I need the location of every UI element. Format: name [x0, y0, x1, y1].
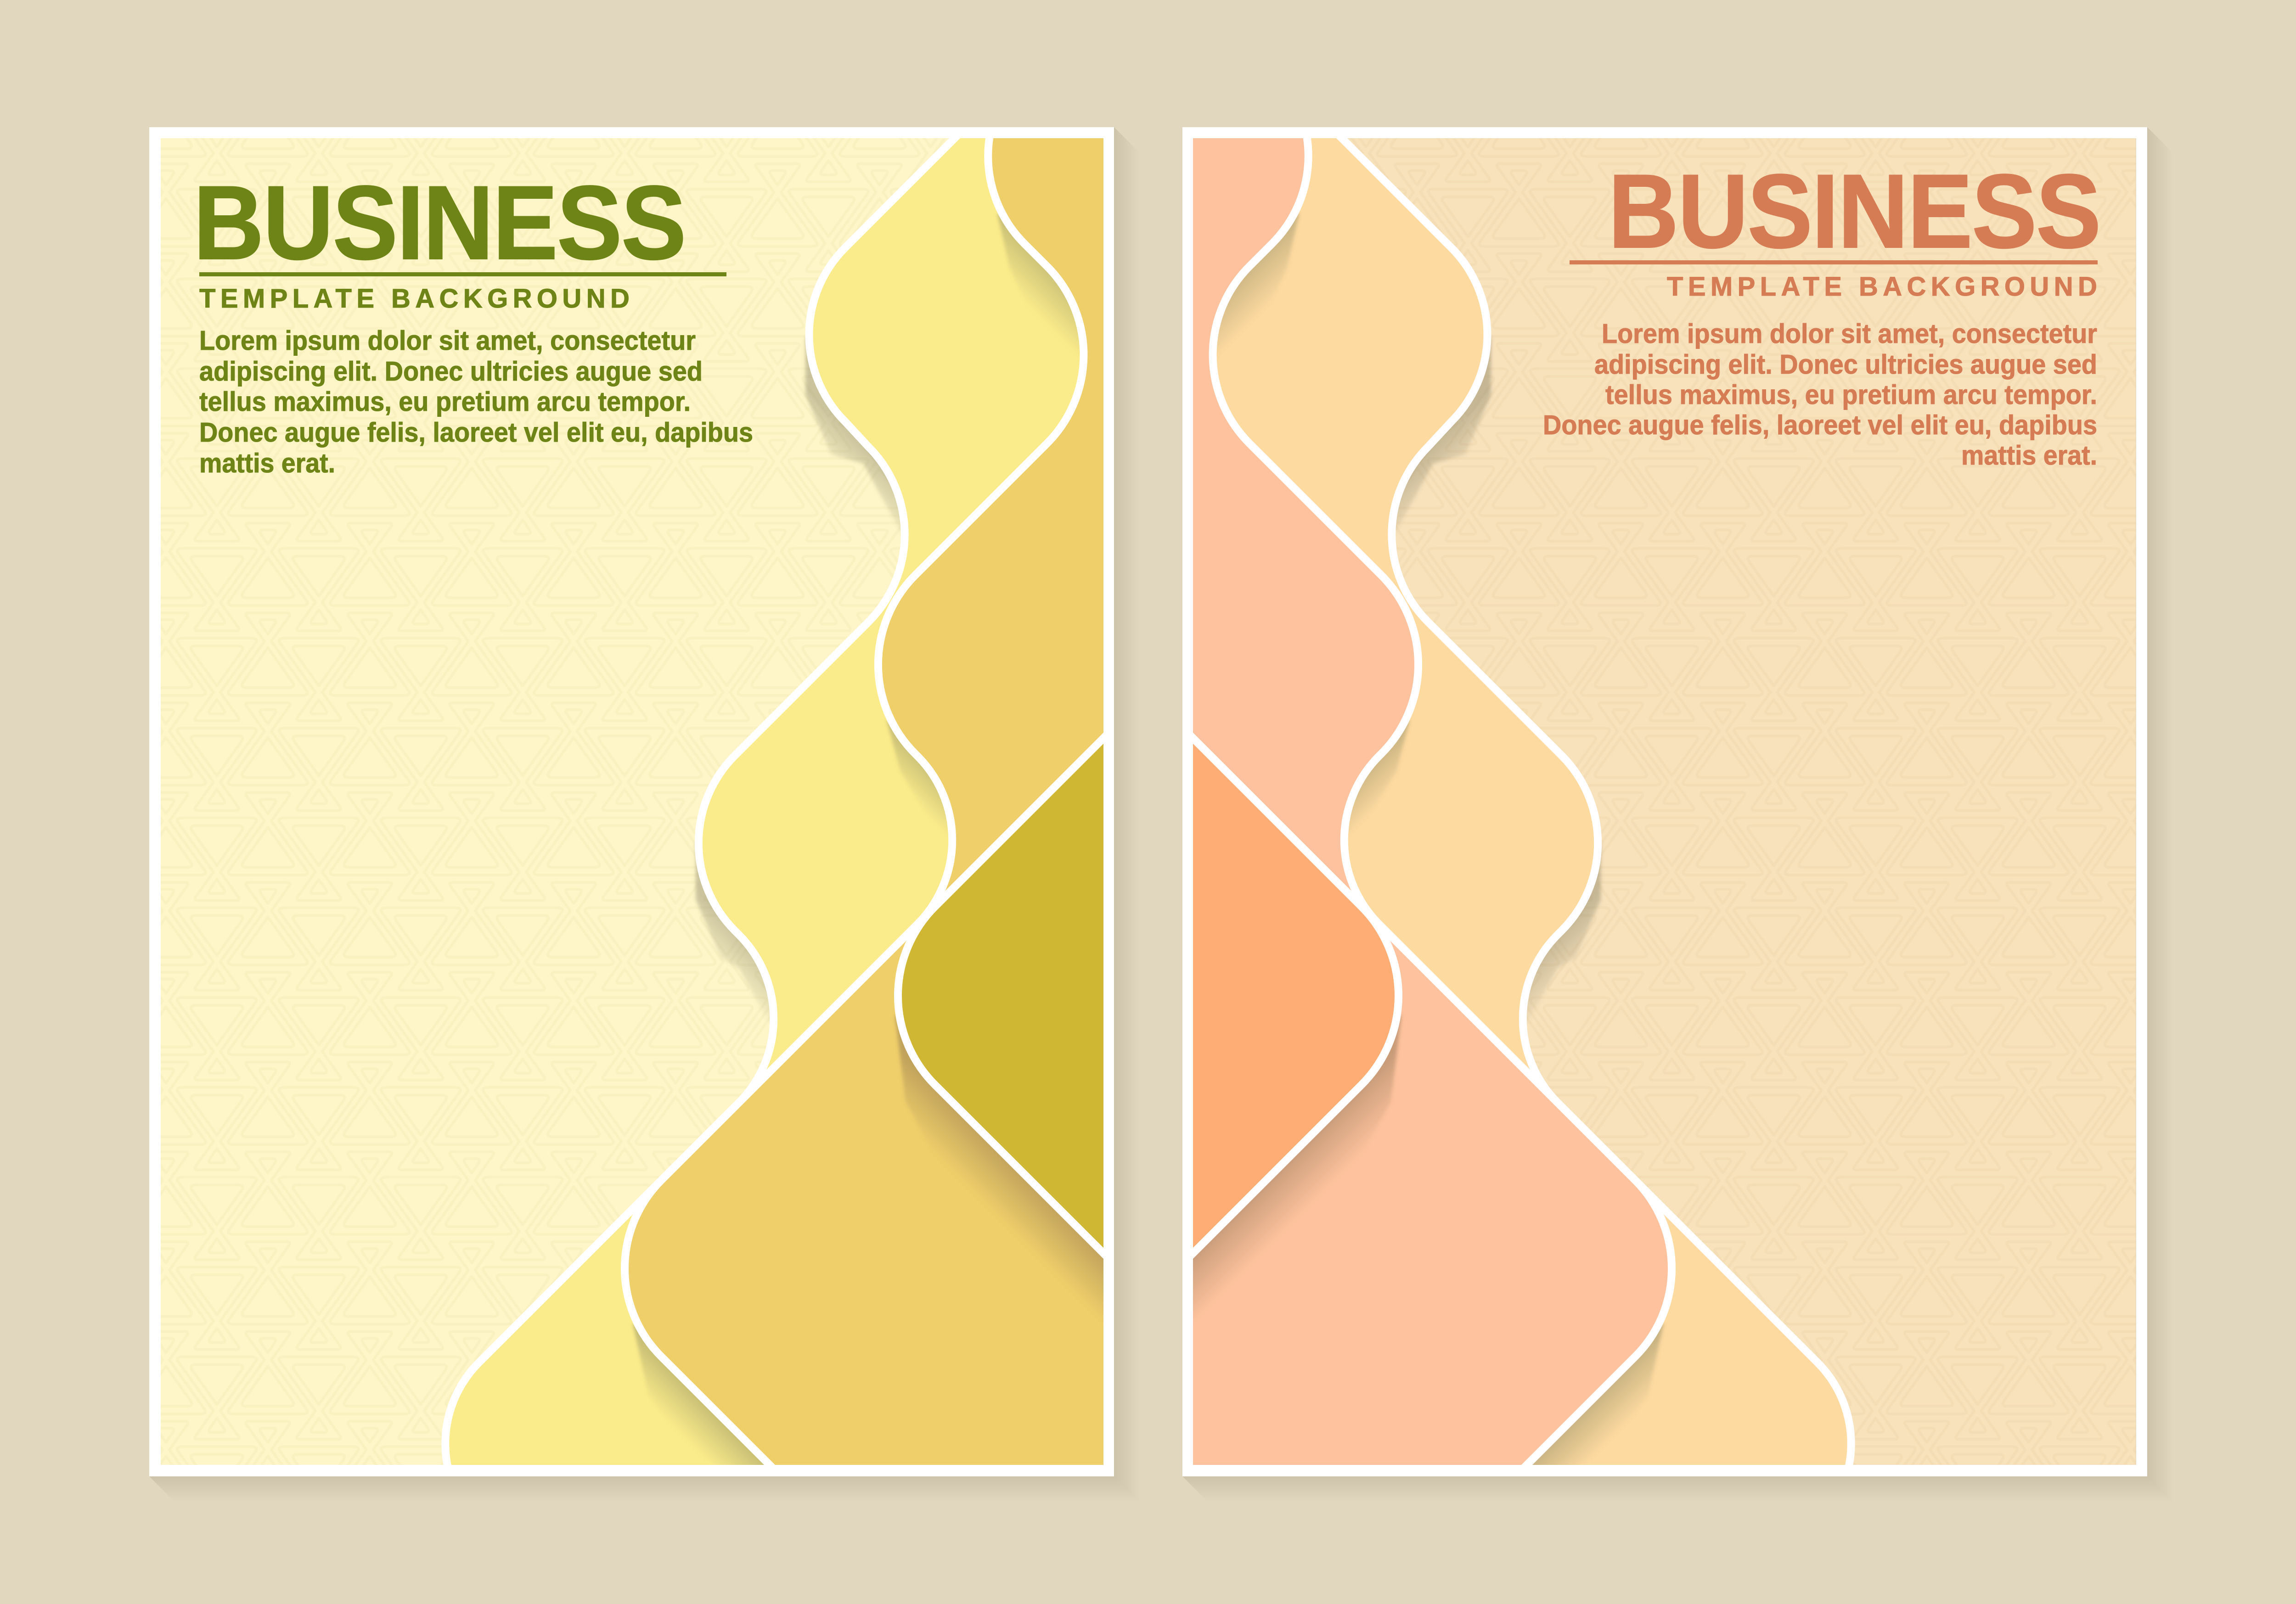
left wave: dark olive	[898, 694, 1148, 1298]
left body text: mattis erat.	[199, 448, 335, 478]
left heading: BUSINESS	[193, 164, 686, 281]
right heading: BUSINESS	[1608, 152, 2100, 270]
left shadow on light yellow, top lobe	[997, 184, 1125, 367]
right body text: Donec augue felis, laoreet vel elit eu, dapibus	[1543, 410, 2097, 440]
right body text	[1543, 319, 2097, 471]
right pattern background	[1193, 138, 2136, 1465]
right shadow on background, middle	[1507, 843, 1601, 1021]
right shadow on salmon	[1171, 1015, 1401, 1329]
left wave: amber upper	[878, 124, 1148, 924]
right wave: orange	[1148, 694, 1399, 1298]
right body text: adipiscing elit. Donec ultricies augue sed	[1594, 349, 2097, 380]
panel: left yellow cover	[149, 124, 1148, 1502]
right shadow on light peach, middle lobe	[1332, 720, 1410, 847]
left shadow on background, middle	[694, 844, 770, 1018]
right cover page and artwork	[1148, 124, 2136, 1476]
right body text: mattis erat.	[1961, 440, 2097, 471]
right body text: tellus maximus, eu pretium arcu tempor.	[1605, 380, 2097, 410]
left shadow on background, upper	[804, 336, 901, 531]
right wave: salmon upper	[1148, 124, 1418, 924]
right shadow on background, upper	[1378, 337, 1491, 535]
panel: right peach cover	[1148, 124, 2173, 1502]
left body text	[199, 325, 753, 478]
left wave: amber lower	[625, 694, 1148, 1476]
right heading rule	[1570, 260, 2098, 264]
right subheading: TEMPLATE BACKGROUND	[1667, 272, 2102, 302]
left cover page and artwork	[161, 124, 1148, 1476]
left subheading: TEMPLATE BACKGROUND	[199, 284, 634, 314]
left shadow on light yellow, bottom	[633, 1324, 790, 1469]
left shadow on amber	[895, 1015, 1125, 1329]
right wave: light peach	[1148, 126, 1851, 1469]
left body text: tellus maximus, eu pretium arcu tempor.	[199, 387, 691, 417]
right wave: salmon lower	[1148, 694, 1672, 1476]
right shadow on light peach, bottom	[1507, 1324, 1664, 1469]
right body text: Lorem ipsum dolor sit amet, consectetur	[1602, 319, 2097, 349]
left shadow on light yellow, middle lobe	[887, 720, 964, 847]
left white frame	[149, 127, 1114, 1476]
left body text: Donec augue felis, laoreet vel elit eu, dapibus	[199, 417, 753, 448]
right shadow on light peach, top lobe	[1171, 184, 1299, 367]
left wave: light yellow	[445, 126, 1148, 1469]
left heading rule	[199, 272, 726, 276]
left pattern background	[161, 138, 949, 1465]
right cover drop shadow	[1182, 127, 2173, 1502]
right white frame	[1182, 127, 2147, 1476]
left body text: adipiscing elit. Donec ultricies augue sed	[199, 356, 703, 387]
left cover drop shadow	[149, 127, 1140, 1502]
left body text: Lorem ipsum dolor sit amet, consectetur	[199, 325, 696, 356]
